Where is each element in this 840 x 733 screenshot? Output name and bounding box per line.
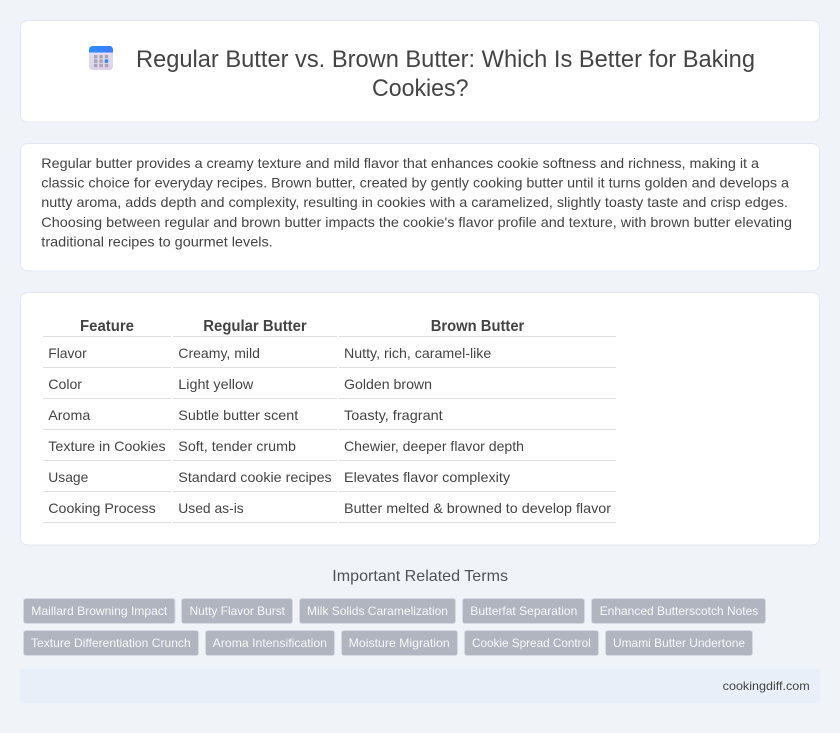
- tag: Milk Solids Caramelization: Milk Solids Caramelization: [307, 604, 448, 618]
- tag: Moisture Migration: Moisture Migration: [349, 636, 450, 650]
- table row: flavor: [48, 345, 492, 361]
- table row: usage: Usage: [48, 469, 89, 485]
- table row: color: Color: [48, 376, 82, 392]
- table row: usage: Elevates flavor complexity: [344, 469, 510, 485]
- table row: texture in cookies: Chewier, deeper flavor depth: [344, 438, 524, 454]
- tag: Cookie Spread Control: [464, 630, 598, 656]
- table header row: Regular Butter: [203, 318, 307, 335]
- table row: flavor: Flavor: [48, 345, 87, 361]
- title: [136, 46, 755, 102]
- text block: introduction paragraph: Regular butter provides a creamy texture and mild flavor that enhances cookie softness and richness, making it a: [41, 155, 759, 171]
- table row: color: Golden brown: [344, 376, 432, 392]
- table header row: Brown Butter: [431, 318, 524, 335]
- table row: usage: [48, 469, 510, 485]
- table header row: [80, 318, 524, 335]
- table row: cooking process: Used as-is: [178, 500, 244, 516]
- heading: important related terms: Important Related Terms: [332, 568, 508, 585]
- table row: aroma: Aroma: [48, 407, 91, 423]
- title: Cookies?: [372, 75, 468, 102]
- text block: introduction paragraph: Choosing between regular and brown butter impacts the cookie's flavor profile and texture, with brown butter elevating: [41, 214, 792, 230]
- table row: cooking process: Butter melted & browned to develop flavor: [344, 500, 611, 516]
- icon: calendar: [89, 46, 113, 70]
- tag: Milk Solids Caramelization: [300, 598, 456, 624]
- text block: introduction paragraph: classic choice for everyday recipes. Brown butter, created by gently cooking butter until it turns golden and develops a: [41, 175, 789, 191]
- text block: introduction paragraph: traditional recipes to gourmet levels.: [41, 233, 273, 249]
- text block: introduction paragraph: nutty aroma, adds depth and complexity, resulting in cookies with a caramelized, slightly toasty taste and crisp edges.: [41, 194, 788, 210]
- table row: usage: Standard cookie recipes: [178, 469, 332, 485]
- tag: Moisture Migration: [342, 630, 458, 656]
- tag list: related terms: [24, 598, 766, 656]
- panel: header: [20, 20, 820, 122]
- footer: cookingdiff.com: [723, 679, 810, 693]
- tag: Umami Butter Undertone: Umami Butter Undertone: [613, 636, 745, 650]
- table row: flavor: Nutty, rich, caramel-like: [344, 345, 492, 361]
- table row: cooking process: [48, 500, 611, 516]
- title: Regular Butter vs. Brown Butter: Which Is Better for Baking: [136, 46, 755, 73]
- table row: aroma: Toasty, fragrant: [344, 407, 443, 423]
- table row: aroma: [48, 407, 443, 423]
- table row: texture in cookies: Texture in Cookies: [48, 438, 166, 454]
- table row: texture in cookies: [48, 438, 524, 454]
- tag: Umami Butter Undertone: [606, 630, 752, 656]
- table header row: Feature: [80, 318, 134, 335]
- panel: comparison table: [20, 292, 820, 545]
- tag: Aroma Intensification: Aroma Intensification: [213, 636, 327, 650]
- tag: Enhanced Butterscotch Notes: Enhanced Butterscotch Notes: [600, 604, 758, 618]
- table row: color: [48, 376, 432, 392]
- tag: Maillard Browning Impact: Maillard Browning Impact: [31, 604, 168, 618]
- tag: Aroma Intensification: [206, 630, 334, 656]
- tag: Maillard Browning Impact: [24, 598, 175, 624]
- tag: Enhanced Butterscotch Notes: [592, 598, 766, 624]
- tag: Butterfat Separation: Butterfat Separation: [470, 604, 577, 618]
- table row: color: Light yellow: [178, 376, 254, 392]
- tag: Butterfat Separation: [462, 598, 584, 624]
- panel: introduction: [20, 144, 820, 271]
- table row: aroma: Subtle butter scent: [178, 407, 298, 423]
- tag: Nutty Flavor Burst: [182, 598, 292, 624]
- tag: Texture Differentiation Crunch: Texture Differentiation Crunch: [31, 636, 191, 650]
- text block: introduction paragraph: [41, 155, 792, 249]
- footer: [20, 669, 820, 703]
- tag: Texture Differentiation Crunch: [24, 630, 198, 656]
- tag: Nutty Flavor Burst: Nutty Flavor Burst: [190, 604, 286, 618]
- table row: cooking process: Cooking Process: [48, 500, 156, 516]
- tag: Cookie Spread Control: Cookie Spread Control: [472, 636, 591, 650]
- table row: texture in cookies: Soft, tender crumb: [178, 438, 296, 454]
- table row: flavor: Creamy, mild: [178, 345, 260, 361]
